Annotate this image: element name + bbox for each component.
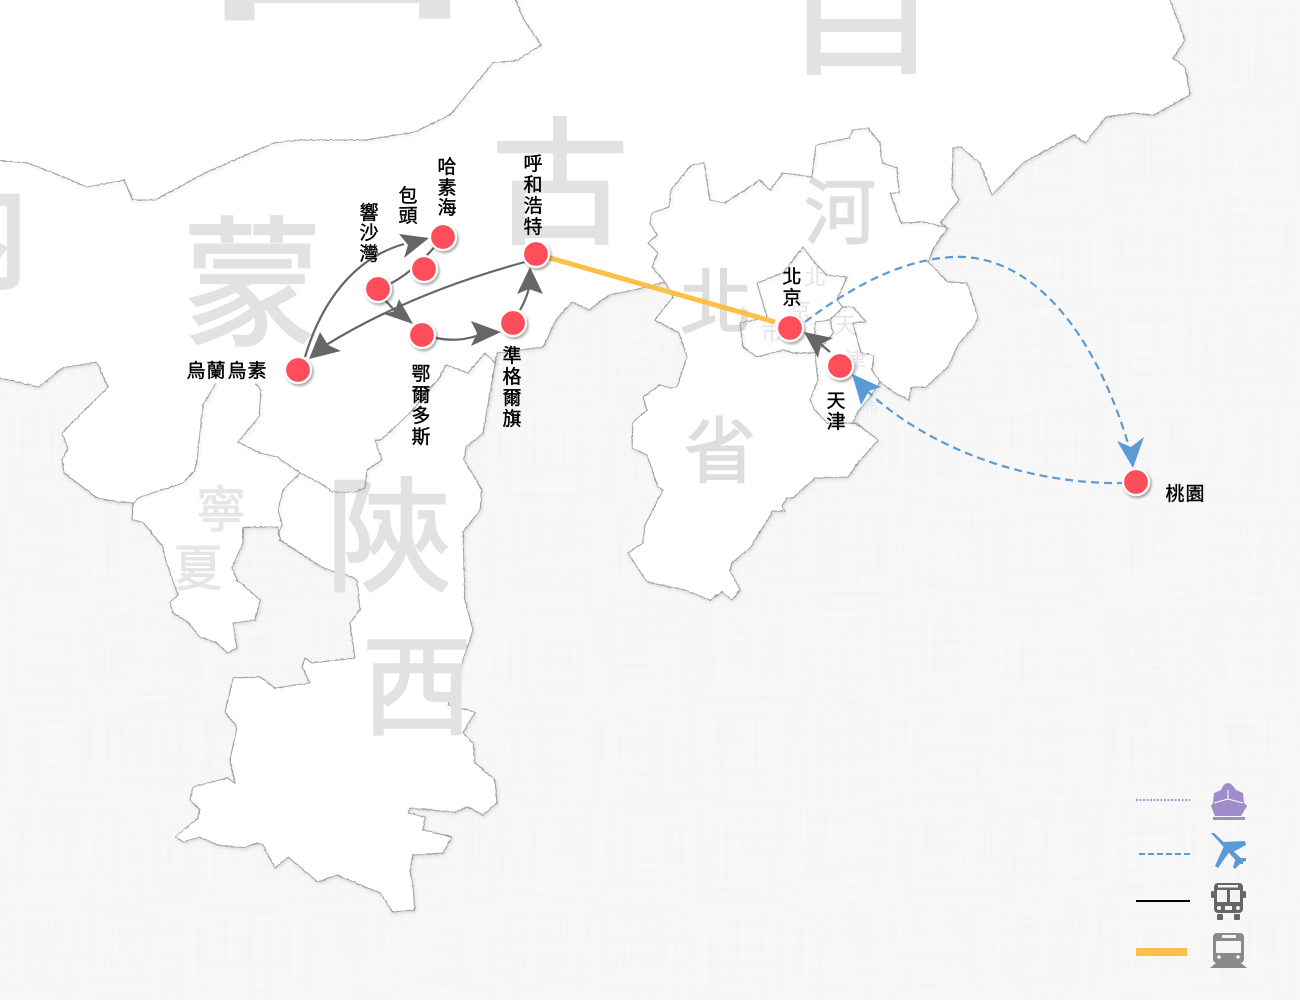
big province labels: 市 [865,399,879,415]
city labels: 桃園 [1165,483,1205,505]
map: internal province borders [0,0,948,535]
bus routes and arrows [305,234,833,359]
flight routes and arrows [805,257,1144,483]
big province labels: 河 [804,174,876,254]
legend: ship route [1136,783,1247,820]
big province labels: 北 [804,265,826,290]
big province labels: 天 [834,313,856,338]
big province labels: 津 [844,348,866,373]
rail route: Hohhot to Beijing [536,254,775,322]
big province labels: 寧 [196,482,246,538]
city labels: 北京 [782,266,802,309]
city labels: 準格爾旗 [502,345,522,430]
legend: rail route [1136,933,1247,968]
city labels: 鄂爾多斯 [411,363,431,448]
city labels: 烏蘭烏素 [186,360,267,382]
city labels: 天津 [826,391,846,433]
big province labels: 古 [491,109,629,263]
city labels: 包頭 [398,185,418,227]
big province labels: 陝 [326,469,450,608]
city labels: 哈素海 [437,156,457,219]
big province labels: 夏 [173,541,223,597]
city markers [285,224,1149,495]
big province labels [0,0,938,750]
big province labels: 西 [362,627,472,750]
big province labels: 蒙 [182,207,322,364]
big province labels: 省 [684,413,756,493]
city labels: 響沙灣 [359,202,379,265]
big province labels: 北 [680,264,752,344]
legend [1136,783,1247,968]
big province labels: 京 [789,298,811,323]
big province labels: 市 [761,321,783,346]
city labels [186,153,1205,505]
legend: bus route [1136,883,1246,920]
city labels: 呼和浩特 [523,153,543,238]
legend: flight route [1139,833,1246,869]
